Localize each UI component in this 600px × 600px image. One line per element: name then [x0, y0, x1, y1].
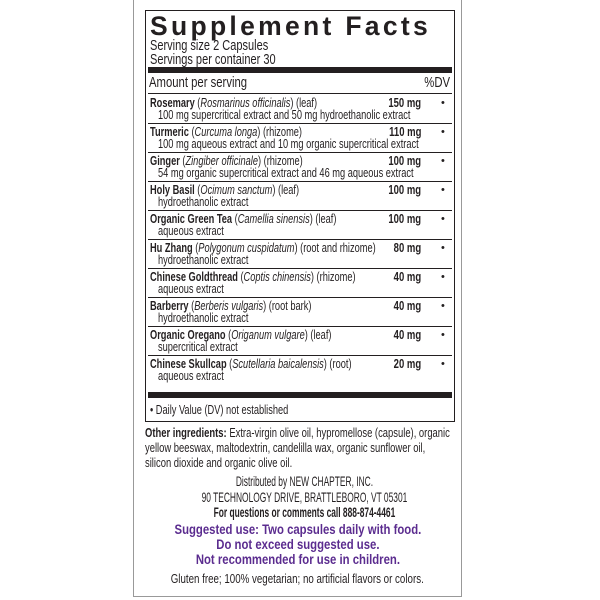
- ingredient rows: 100 mg supercritical extract and 50 mg hydroethanolic extract: [158, 108, 410, 122]
- serving info: [150, 38, 276, 68]
- header row: [149, 75, 450, 91]
- distributor: Distributed by NEW CHAPTER, INC.: [236, 473, 373, 489]
- ingredient rows: 40 mg: [394, 328, 421, 342]
- ingredient rows: •: [441, 242, 445, 254]
- ingredient rows: •: [441, 300, 445, 312]
- panel: supplement facts box: [145, 10, 455, 422]
- ingredient rows: 100 mg: [388, 154, 421, 168]
- distributor: [202, 473, 407, 520]
- outer frame: [133, 0, 462, 597]
- ingredient rows: hydroethanolic extract: [158, 253, 248, 267]
- ingredient rows: Ginger (Zingiber officinale) (rhizome): [150, 154, 303, 168]
- ingredient rows: 110 mg: [389, 125, 421, 139]
- suggested use: [174, 522, 421, 567]
- suggested use: Suggested use: Two capsules daily with food.: [174, 522, 421, 537]
- thick bar top: [148, 67, 452, 73]
- ingredient rows: Organic Green Tea (Camellia sinensis) (leaf): [150, 212, 336, 226]
- other ingredients: Other ingredients: Extra-virgin olive oil, hypromellose (capsule), organic: [145, 425, 450, 440]
- suggested use: Not recommended for use in children.: [195, 552, 400, 567]
- ingredient rows: •: [441, 155, 445, 167]
- ingredient rows: aqueous extract: [158, 224, 224, 238]
- header row: Amount per serving: [149, 75, 247, 91]
- ingredient rows: 80 mg: [394, 241, 421, 255]
- ingredient rows: 100 mg: [388, 212, 421, 226]
- ingredient rows: [148, 96, 452, 383]
- title: Supplement Facts: [150, 11, 431, 41]
- ingredient rows: 40 mg: [394, 299, 421, 313]
- ingredient rows: aqueous extract: [158, 282, 224, 296]
- ingredient rows: Barberry (Berberis vulgaris) (root bark): [150, 299, 311, 313]
- serving info: Servings per container 30: [150, 52, 276, 68]
- ingredient rows: Turmeric (Curcuma longa) (rhizome): [150, 125, 302, 139]
- header row: %DV: [424, 75, 450, 91]
- other ingredients: yellow beeswax, maltodextrin, candelilla wax, organic sunflower oil,: [145, 440, 425, 455]
- ingredient rows: •: [441, 126, 445, 138]
- thick bar bottom: [148, 392, 452, 398]
- suggested use: Do not exceed suggested use.: [216, 537, 379, 552]
- other ingredients: silicon dioxide and organic olive oil.: [145, 455, 292, 470]
- distributor: 90 TECHNOLOGY DRIVE, BRATTLEBORO, VT 05301: [202, 488, 407, 504]
- ingredient rows: •: [441, 329, 445, 341]
- ingredient rows: aqueous extract: [158, 369, 224, 383]
- ingredient rows: •: [441, 213, 445, 225]
- ingredient rows: 40 mg: [394, 270, 421, 284]
- footer claims: Gluten free; 100% vegetarian; no artificial flavors or colors.: [171, 572, 424, 586]
- ingredient rows: •: [441, 358, 445, 370]
- other ingredients: [145, 425, 450, 470]
- ingredient rows: Chinese Skullcap (Scutellaria baicalensis) (root): [150, 357, 352, 371]
- distributor: For questions or comments call 888-874-4461: [214, 504, 395, 520]
- ingredient rows: 20 mg: [394, 357, 421, 371]
- ingredient rows: Organic Oregano (Origanum vulgare) (leaf): [150, 328, 331, 342]
- ingredient rows: Holy Basil (Ocimum sanctum) (leaf): [150, 183, 299, 197]
- ingredient rows: hydroethanolic extract: [158, 195, 248, 209]
- ingredient rows: •: [441, 184, 445, 196]
- ingredient rows: 150 mg: [388, 96, 421, 110]
- ingredient rows: •: [441, 97, 445, 109]
- serving info: Serving size 2 Capsules: [150, 38, 268, 54]
- ingredient rows: supercritical extract: [158, 340, 238, 354]
- ingredient rows: 100 mg aqueous extract and 10 mg organic supercritical extract: [158, 137, 419, 151]
- footnote: • Daily Value (DV) not established: [150, 403, 288, 417]
- ingredient rows: hydroethanolic extract: [158, 311, 248, 325]
- ingredient rows: Rosemary (Rosmarinus officinalis) (leaf): [150, 96, 317, 110]
- ingredient rows: Hu Zhang (Polygonum cuspidatum) (root and rhizome): [150, 241, 376, 255]
- ingredient rows: 54 mg organic supercritical extract and 46 mg aqueous extract: [158, 166, 414, 180]
- ingredient rows: Chinese Goldthread (Coptis chinensis) (rhizome): [150, 270, 356, 284]
- ingredient rows: •: [441, 271, 445, 283]
- ingredient rows: 100 mg: [388, 183, 421, 197]
